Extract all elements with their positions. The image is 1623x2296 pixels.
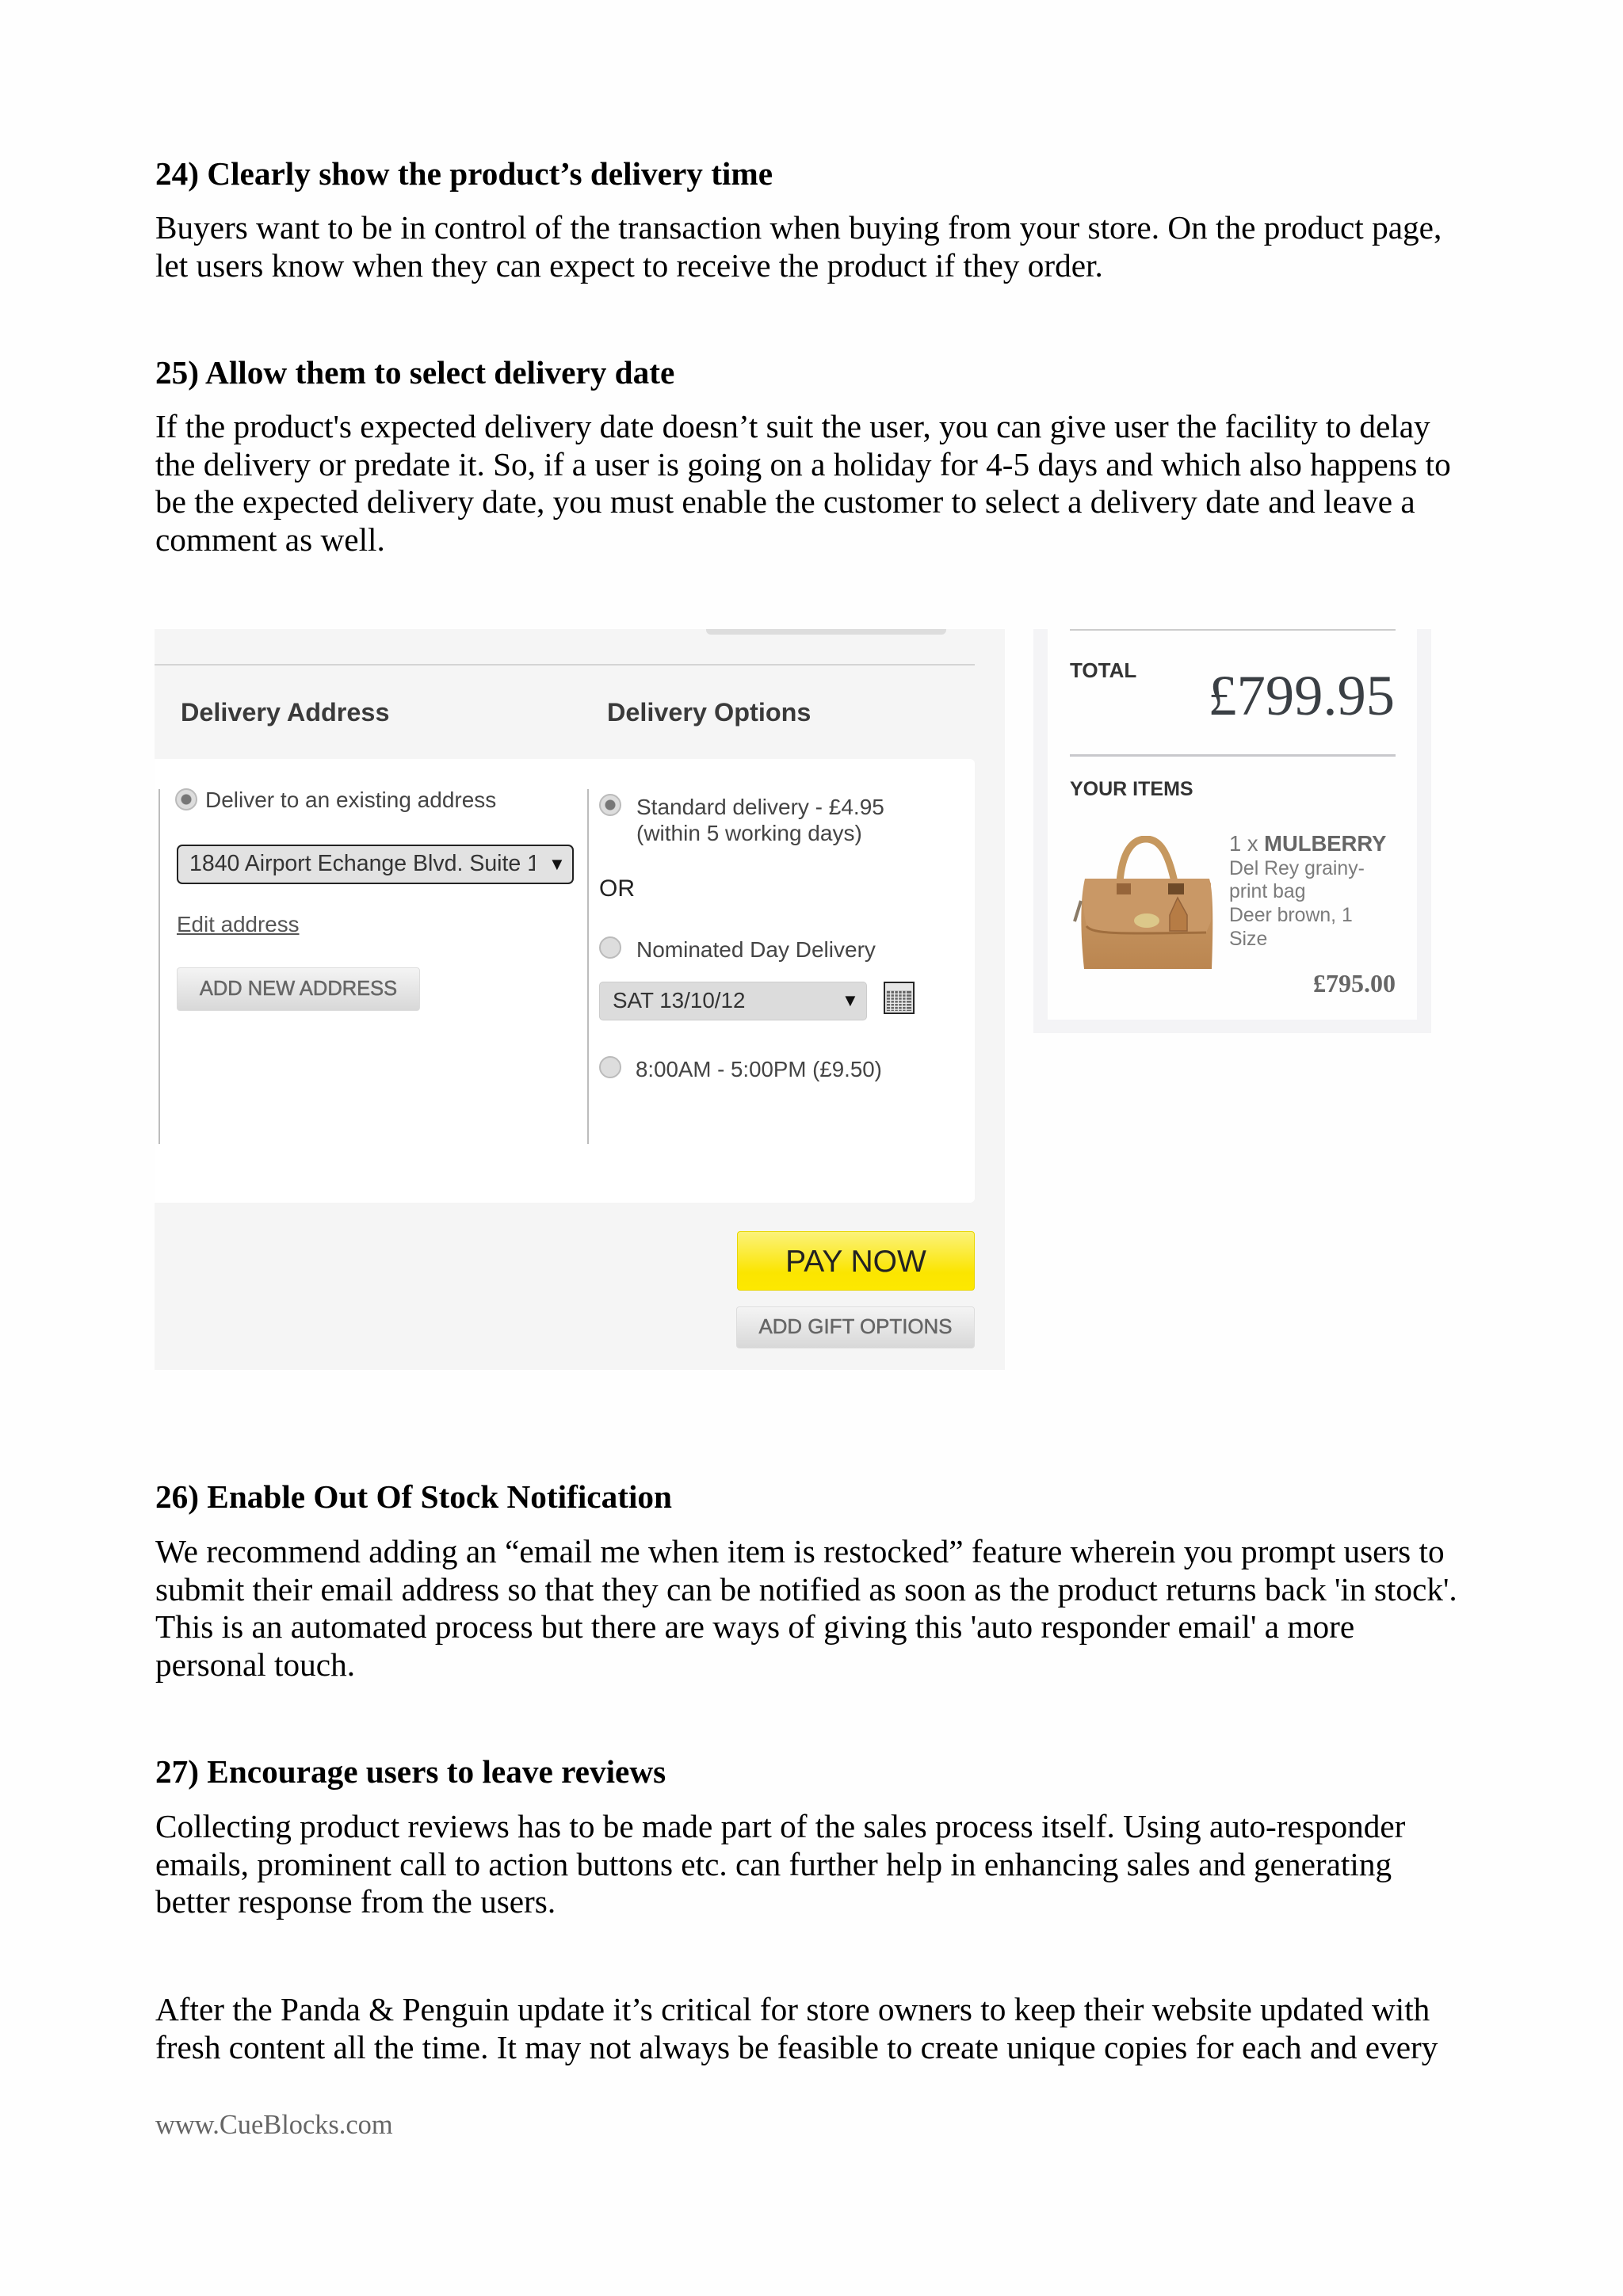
date text: SAT 13/10/12 <box>613 988 745 1013</box>
panel: order summary screenshot <box>1033 629 1431 1033</box>
heading: delivery options: Delivery Options <box>607 698 811 727</box>
text: item 25 body: be the expected delivery date, you must enable the customer to select a delivery date and leave a <box>155 483 1415 520</box>
text: item 27 body: better response from the users. <box>155 1883 556 1920</box>
text: item 25 body: the delivery or predate it. So, if a user is going on a holiday for 4-5 days and which also happens to <box>155 446 1451 482</box>
text: item details: Del Rey grainy- <box>1229 858 1365 879</box>
text: item 24 body <box>155 209 1442 284</box>
text: item details: Deer brown, 1 <box>1229 905 1353 926</box>
button: add gift options <box>736 1306 975 1348</box>
button: add new address <box>177 967 420 1011</box>
text: closing paragraph: After the Panda & Penguin update it’s critical for store owners to keep their website updated with <box>155 1991 1430 2027</box>
button: pay now: PAY NOW <box>785 1245 926 1279</box>
button: pay now <box>737 1231 975 1291</box>
dropdown arrow: ▼ <box>842 990 859 1010</box>
text: item 26 body: This is an automated process but there are ways of giving this 'auto responder email' a more <box>155 1608 1354 1645</box>
icon: calendar <box>884 982 915 1014</box>
text: item details: print bag <box>1229 881 1306 902</box>
label: standard delivery: (within 5 working days) <box>636 821 862 845</box>
text: item 27 body: Collecting product reviews has to be made part of the sales process itself. Using auto-responder <box>155 1808 1405 1844</box>
radio: existing address selected <box>175 788 197 810</box>
value: item price: £795.00 <box>1313 969 1396 997</box>
radio: standard delivery selected <box>599 794 621 816</box>
text: item 26 body: submit their email address so that they can be notified as soon as the product returns back 'in stock'. <box>155 1571 1457 1608</box>
radio: time slot <box>599 1056 621 1078</box>
text: item details <box>1229 831 1386 950</box>
button: add new address: ADD NEW ADDRESS <box>200 978 397 1000</box>
tab remnant <box>706 629 946 635</box>
label: standard delivery: Standard delivery - £4.95 <box>636 795 884 819</box>
text: item 26 body: We recommend adding an “email me when item is restocked” feature wherein you prompt users to <box>155 1533 1445 1569</box>
value: total price: £799.95 <box>1208 663 1395 727</box>
text: closing paragraph <box>155 1991 1438 2065</box>
select: address <box>177 845 574 884</box>
label: your items: YOUR ITEMS <box>1070 778 1193 800</box>
label: existing address: Deliver to an existing address <box>205 788 496 812</box>
text: item 25 body: comment as well. <box>155 521 385 558</box>
text: item 24 body: let users know when they can expect to receive the product if they order. <box>155 247 1103 284</box>
text: item 27 body: emails, prominent call to action buttons etc. can further help in enhancing sales and generating <box>155 1846 1392 1882</box>
heading: item 27: 27) Encourage users to leave reviews <box>155 1753 666 1790</box>
heading: item 25: 25) Allow them to select delivery date <box>155 354 674 391</box>
button: add gift options: ADD GIFT OPTIONS <box>758 1316 953 1338</box>
panel: checkout delivery form screenshot <box>155 629 1005 1370</box>
radio: nominated day <box>599 936 621 959</box>
icon: brown handbag <box>1073 836 1212 969</box>
text: closing paragraph: fresh content all the time. It may not always be feasible to create unique copies for each and every <box>155 2029 1438 2065</box>
text: item 26 body <box>155 1533 1457 1683</box>
text: item details: Size <box>1229 929 1267 950</box>
panel: white form area <box>155 759 975 1203</box>
text: item 26 body: personal touch. <box>155 1646 355 1683</box>
select: date <box>599 982 867 1020</box>
link: edit address: Edit address <box>177 912 300 936</box>
label: total: TOTAL <box>1070 658 1136 682</box>
text: item 25 body: If the product's expected delivery date doesn’t suit the user, you can give user the facility to delay <box>155 408 1430 444</box>
dropdown arrow: ▼ <box>548 854 566 874</box>
label: nominated day: Nominated Day Delivery <box>636 937 876 962</box>
heading: item 24: 24) Clearly show the product’s delivery time <box>155 155 773 192</box>
text: item details: 1 x MULBERRY <box>1229 831 1386 856</box>
text: item 24 body: Buyers want to be in control of the transaction when buying from your store. On the product page, <box>155 209 1442 246</box>
text: item 25 body <box>155 408 1451 558</box>
heading: delivery address: Delivery Address <box>181 698 389 727</box>
footer: website: www.CueBlocks.com <box>155 2110 393 2140</box>
panel: white summary card <box>1048 629 1417 1020</box>
label: time slot: 8:00AM - 5:00PM (£9.50) <box>636 1057 882 1081</box>
label: or: OR <box>599 875 635 902</box>
label: standard delivery <box>636 795 884 845</box>
text: item 27 body <box>155 1808 1405 1920</box>
heading: item 26: 26) Enable Out Of Stock Notification <box>155 1478 672 1515</box>
